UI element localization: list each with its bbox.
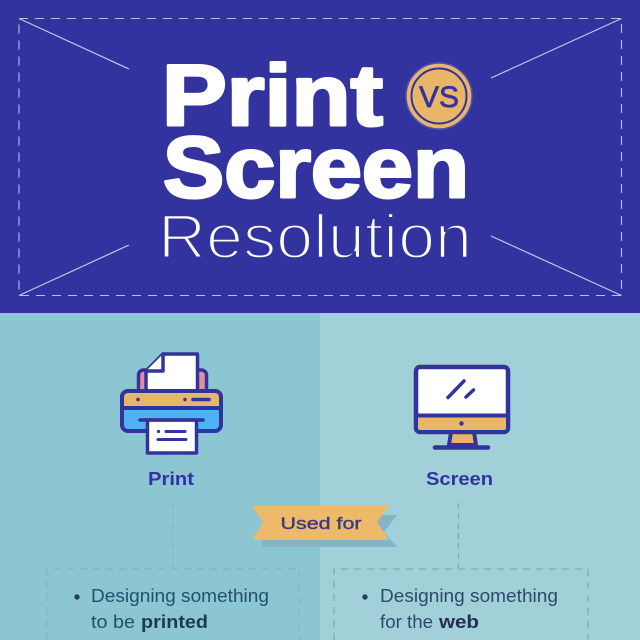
panel: left print background xyxy=(0,313,320,640)
icon: monitor xyxy=(416,367,508,448)
title: Resolution: Resolution xyxy=(158,203,472,272)
bullet text: print: Designing something xyxy=(91,586,269,606)
badge: VS xyxy=(406,63,472,129)
connector: left xyxy=(172,503,174,568)
connector: right xyxy=(458,503,460,568)
bullet text: print xyxy=(74,586,269,632)
panel: title banner xyxy=(0,0,640,313)
panel: right screen background xyxy=(320,313,640,640)
title: Print: Print xyxy=(162,48,383,144)
bullet text: screen xyxy=(362,586,558,632)
panel: screen uses xyxy=(334,569,588,640)
panel: print uses xyxy=(47,569,299,640)
bullet text: screen: Designing something xyxy=(380,586,558,606)
icon: printer xyxy=(122,354,221,453)
ribbon: Used for xyxy=(252,506,397,547)
bullet text: print: to be xyxy=(91,612,135,632)
label: Print: Print xyxy=(148,469,194,489)
ribbon: Used for: Used for xyxy=(280,514,362,533)
badge: VS: VS xyxy=(419,81,459,114)
label: Screen: Screen xyxy=(426,469,493,489)
bullet text: print: printed xyxy=(141,612,208,632)
bullet text: screen: web xyxy=(438,612,479,632)
bullet text: screen: for the xyxy=(380,612,433,632)
title: Screen: Screen xyxy=(163,120,469,216)
